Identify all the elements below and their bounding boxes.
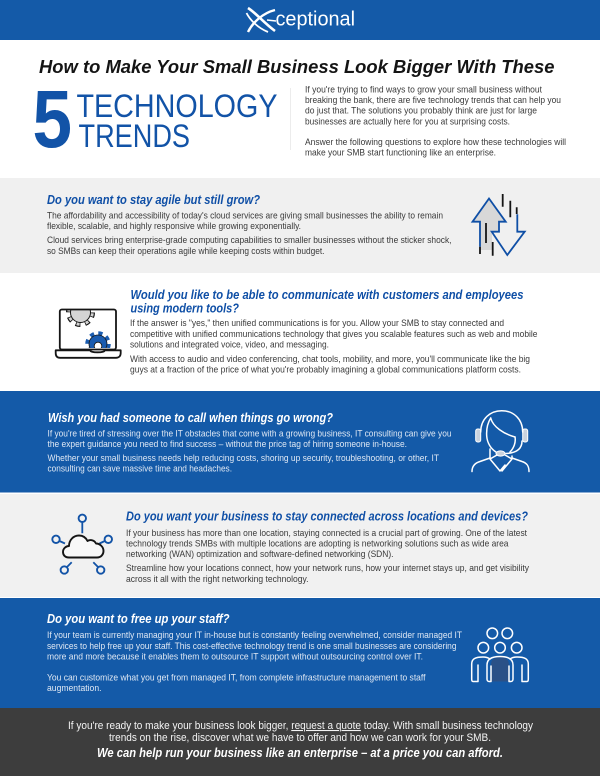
panel: free up staff [0, 598, 600, 708]
body text: competitive with unified communications technology that gives you scalable features such as web and mobile [130, 329, 538, 339]
closing tagline: We can help run your business like an enterprise – at a price you can afford. [97, 745, 503, 760]
body text: If your business has more than one location, staying connected is a crucial part of growing. One of the latest [126, 528, 527, 538]
body text: With access to audio and video conferencing, chat tools, mobility, and more, you'll communicate like the big [130, 354, 530, 364]
logo: Xceptional: ceptional [276, 8, 355, 30]
heading: Do you want your business to stay connected across locations and devices? [126, 508, 528, 524]
call to action text [68, 720, 534, 744]
logo: Xceptional [246, 8, 355, 32]
panel: call to action [0, 708, 600, 776]
body text: across it all with the right networking technology. [126, 574, 308, 584]
heading: 5 Technology Trends [32, 74, 278, 165]
intro text: make your SMB start functioning like an enterprise. [305, 148, 496, 158]
intro text [305, 84, 566, 158]
body text: solutions and integrated voice, video, and messaging. [130, 340, 329, 350]
body text: services to help free up your staff. This cost-effective technology trend is one small businesses are considering [47, 641, 456, 651]
body text: the expert guidance you need to find success – without the price tag of hiring someone in-house. [48, 439, 407, 449]
heading: Do you want to stay agile but still grow? [47, 192, 260, 207]
body text [130, 318, 538, 374]
title: How to Make Your Small Business Look Bigger With These [39, 56, 554, 77]
panel: modern communication tools [54, 290, 538, 374]
body text: more and more because it enables them to outsource IT support without outsourcing control over IT. [47, 652, 423, 662]
body text: Streamline how your locations connect, how your network runs, how your internet stays up, and get visibility [126, 563, 529, 573]
heading [130, 287, 524, 316]
heading: Wish you had someone to call when things go wrong? [48, 410, 333, 425]
body text: If the answer is "yes," then unified communications is for you. Allow your SMB to stay connected and [130, 318, 504, 328]
body text: networking (WAN) optimization and software-defined networking (SDN). [126, 549, 394, 559]
body text: augmentation. [47, 683, 102, 693]
body text [48, 428, 452, 474]
body text [47, 210, 452, 256]
heading: Would you like to be able to communicate with customers and employees [130, 287, 524, 302]
panel: stay connected [0, 494, 600, 597]
intro text: Answer the following questions to explore how these technologies will [305, 137, 566, 147]
body text: You can customize what you get from managed IT, from complete infrastructure management to staff [47, 672, 426, 682]
body text: The affordability and accessibility of today's cloud services are giving small businesses the ability to remain [47, 210, 443, 220]
icon: support agent with headset [472, 411, 529, 472]
panel: stay agile [0, 178, 600, 273]
icon: up and down arrows [472, 194, 525, 256]
body text: Cloud services bring enterprise-grade computing capabilities to smaller businesses without the sticker shock, [47, 235, 452, 245]
body text: If your team is currently managing your IT in-house but is constantly feeling overwhelmed, consider managed IT [47, 630, 462, 640]
body text [47, 630, 462, 693]
icon: laptop with gears [56, 302, 121, 358]
body text: consulting can save massive time and headaches. [48, 464, 232, 474]
body text: guys at a fraction of the price of what you're probably imagining a global communications platform costs. [130, 364, 521, 374]
heading: 5 Technology Trends: TRENDS [78, 118, 190, 154]
heading: using modern tools? [130, 300, 239, 316]
body text [126, 528, 529, 584]
body text: Whether your small business needs help reducing costs, shoring up security, troubleshooting, or other, IT [48, 453, 439, 463]
heading: 5 Technology Trends: TECHNOLOGY [76, 88, 278, 124]
icon: team of people [472, 628, 528, 682]
intro text: do just that. The solutions you probably think are just for large [305, 106, 537, 116]
body text: If you're tired of stressing over the IT obstacles that come with a growing business, IT consulting can give you [48, 428, 452, 438]
body text: technology trends SMBs with multiple locations are adopting is networking solutions such as wide area [126, 538, 509, 548]
icon: cloud network [52, 515, 112, 574]
panel: someone to call [0, 391, 600, 492]
intro text: businesses are actually here for you at surprising costs. [305, 116, 510, 126]
heading: Do you want to free up your staff? [47, 611, 230, 626]
call to action text: If you're ready to make your business look bigger, request a quote today. With small business technology [68, 720, 534, 732]
body text: so SMBs can keep their operations agile while keeping costs within budget. [47, 246, 324, 256]
intro text: breaking the bank, there are five technology trends that can help you [305, 95, 561, 105]
header band with logo [0, 0, 600, 40]
intro text: If you're trying to find ways to grow your small business without [305, 84, 542, 94]
call to action text: trends on the rise, discover what we have to offer and how we can work for your SMB. [109, 732, 491, 744]
heading: 5 Technology Trends: 5 [32, 74, 72, 165]
body text: flexible, scalable, and highly responsive while growing exponentially. [47, 221, 301, 231]
